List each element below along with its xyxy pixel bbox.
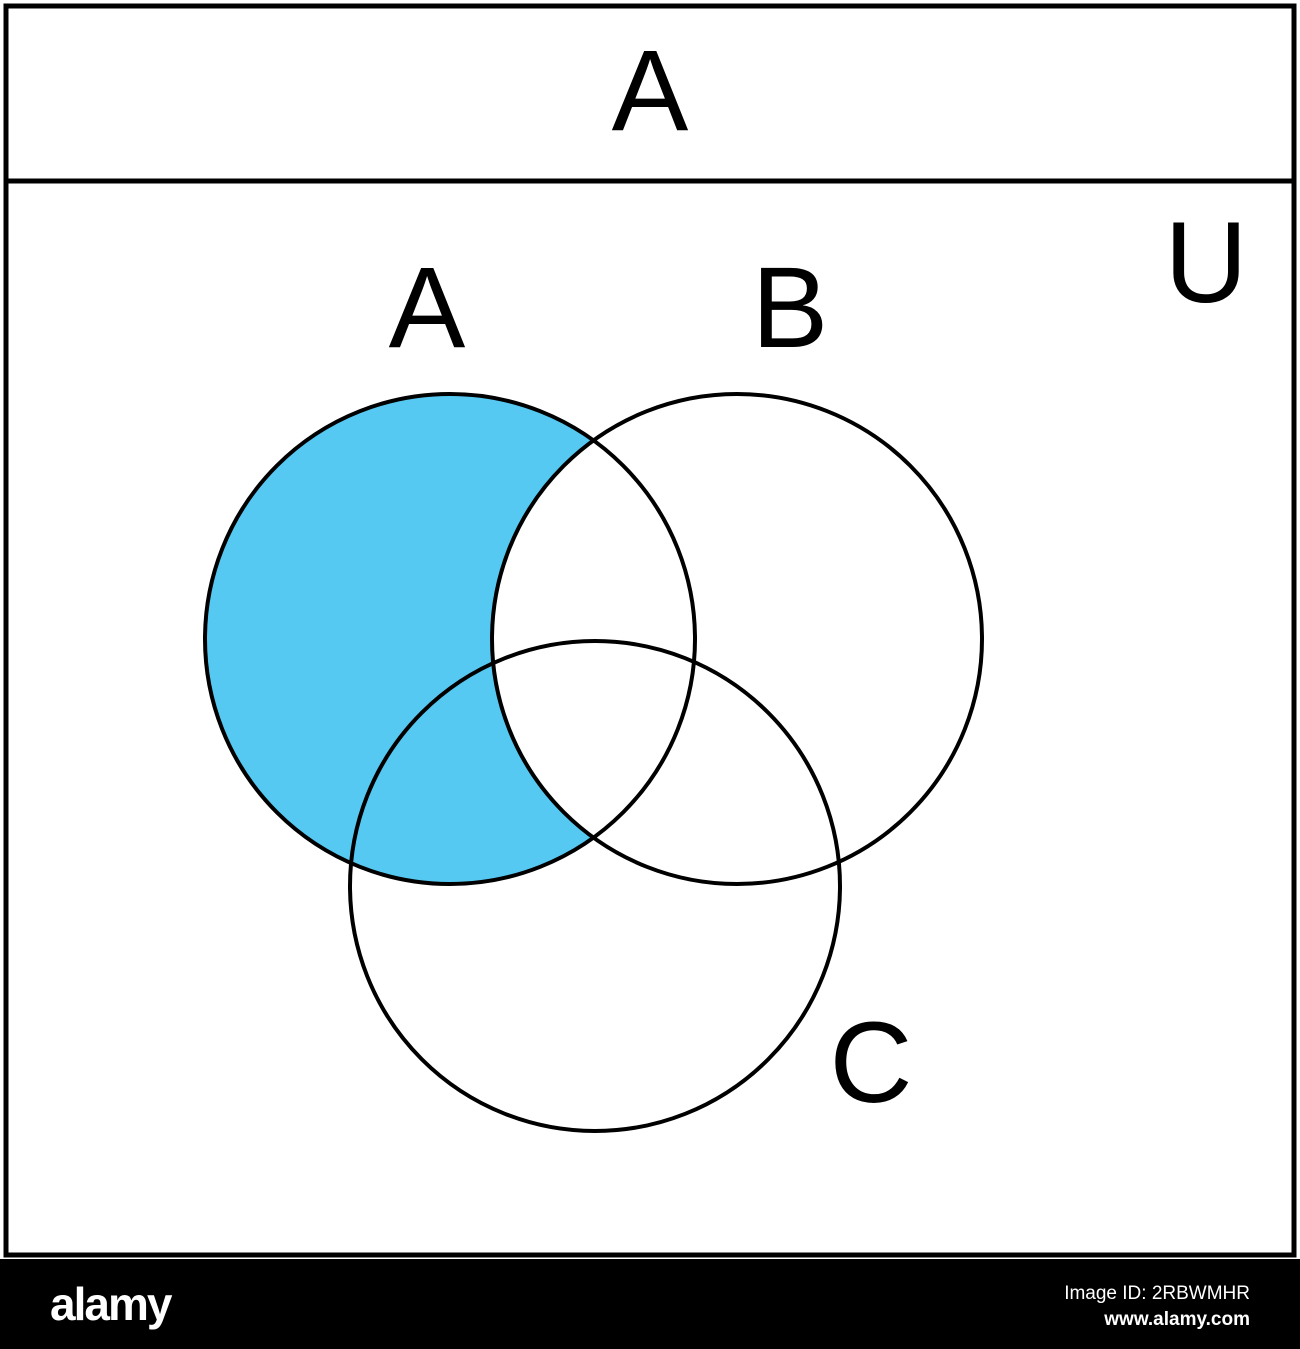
label: A: A xyxy=(389,244,466,372)
image id text xyxy=(1064,1283,1250,1330)
label: C: C xyxy=(829,999,913,1127)
circle A xyxy=(205,394,695,884)
shaded region: A minus B xyxy=(205,394,982,884)
circle B xyxy=(492,394,982,884)
logo text: alamy xyxy=(50,1278,170,1330)
circle C xyxy=(350,641,840,1131)
label: B: B xyxy=(752,244,828,372)
footer bar xyxy=(0,1259,1300,1349)
image id text: www.alamy.com xyxy=(1104,1309,1250,1330)
image id text: Image ID: 2RBWMHR xyxy=(1064,1283,1250,1304)
label: U: U xyxy=(1164,199,1248,327)
title: A xyxy=(612,27,689,155)
